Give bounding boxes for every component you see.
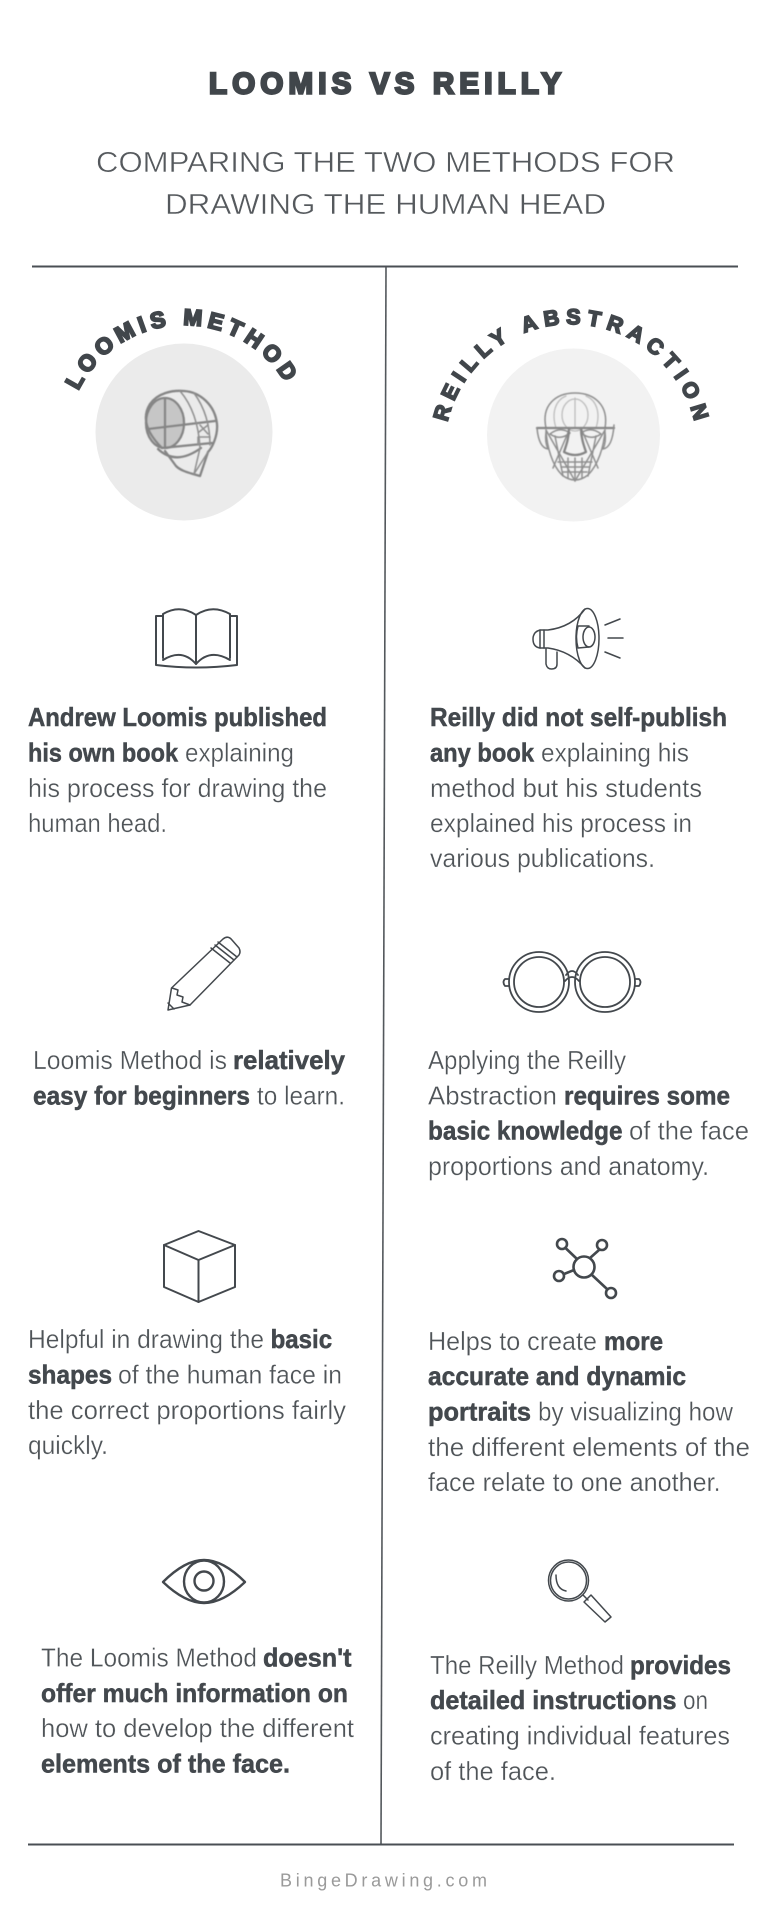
- footer: BingeDrawing.com: [280, 1871, 487, 1891]
- text block: Reilly knowledge: basic knowledge: [428, 1116, 622, 1146]
- text block: Reilly publication: explained his process in: [430, 808, 692, 838]
- icon: network nodes: [554, 1239, 616, 1298]
- text block: Reilly knowledge: requires some: [564, 1080, 730, 1110]
- text block: Loomis publication: Andrew Loomis published: [28, 702, 327, 732]
- text block: Loomis publication: explaining: [185, 738, 294, 768]
- text block: Loomis basic shapes: the correct proportions fairly: [28, 1395, 346, 1425]
- text block: Reilly publication: method but his students: [430, 773, 702, 803]
- subtitle: [96, 147, 675, 221]
- text block: Reilly dynamic portraits: more: [604, 1326, 663, 1356]
- icon: cube: [164, 1231, 235, 1302]
- text block: Loomis publication: his own book: [28, 738, 178, 768]
- icon: eye: [163, 1560, 245, 1603]
- text block: Reilly details: creating individual features: [430, 1721, 730, 1751]
- text block: Reilly publication: explaining his: [541, 738, 689, 768]
- panel: Reilly abstraction header: [432, 308, 710, 522]
- text block: Reilly dynamic portraits: [428, 1326, 750, 1497]
- text block: Reilly knowledge: proportions and anatomy.: [428, 1151, 709, 1181]
- text block: Reilly publication: [430, 702, 727, 873]
- text block: Loomis limits: offer much information on: [41, 1678, 348, 1708]
- subtitle: DRAWING THE HUMAN HEAD: [165, 189, 606, 221]
- circle background: [487, 348, 660, 522]
- text block: Reilly publication: any book: [430, 738, 534, 768]
- text block: Loomis limits: The Loomis Method: [41, 1643, 257, 1673]
- icon: Reilly abstraction head: [537, 393, 614, 481]
- text block: Reilly details: on: [683, 1685, 708, 1715]
- text block: Loomis basic shapes: [28, 1324, 346, 1460]
- curved heading: Reilly Abstraction: REILLY ABSTRACTION: [432, 308, 710, 422]
- text block: Reilly details: provides: [630, 1650, 731, 1680]
- circle background: [96, 344, 272, 520]
- title: LOOMIS VS REILLY: [209, 68, 561, 100]
- text block: Loomis limits: [41, 1643, 355, 1779]
- text block: Reilly knowledge: of the face: [629, 1116, 749, 1146]
- text block: Reilly details: [430, 1650, 731, 1786]
- icon: pencil: [168, 937, 240, 1010]
- icon: round glasses: [504, 952, 640, 1012]
- curved heading: Loomis Method: LOOMIS METHOD: [64, 308, 296, 391]
- text block: Reilly details: of the face.: [430, 1756, 556, 1786]
- text block: Loomis publication: human head.: [28, 808, 167, 838]
- text block: Reilly dynamic portraits: portraits: [428, 1397, 531, 1427]
- text block: Reilly knowledge: [428, 1045, 749, 1181]
- text block: Reilly dynamic portraits: Helps to create: [428, 1326, 597, 1356]
- icon: Loomis head construction: [146, 391, 217, 476]
- text block: Reilly publication: Reilly did not self-publish: [430, 702, 727, 732]
- subtitle: COMPARING THE TWO METHODS FOR: [96, 147, 675, 179]
- text block: Reilly details: detailed instructions: [430, 1685, 676, 1715]
- text block: Loomis limits: doesn't: [263, 1643, 352, 1673]
- text block: Loomis basic shapes: of the human face in: [118, 1360, 342, 1390]
- text block: Loomis basic shapes: shapes: [28, 1360, 112, 1390]
- text block: Loomis limits: elements of the face.: [41, 1749, 290, 1779]
- text block: Loomis basic shapes: basic: [271, 1324, 332, 1354]
- text block: Reilly dynamic portraits: accurate and dynamic: [428, 1361, 686, 1391]
- text block: Loomis ease: to learn.: [257, 1080, 345, 1110]
- icon: megaphone: [533, 608, 623, 669]
- text block: Reilly knowledge: Abstraction: [428, 1080, 557, 1110]
- text block: Reilly dynamic portraits: by visualizing how: [538, 1397, 733, 1427]
- text block: Loomis limits: how to develop the different: [41, 1713, 355, 1743]
- text block: Loomis ease: [33, 1045, 346, 1110]
- panel: Loomis method header: [64, 308, 296, 520]
- text block: Loomis ease: Loomis Method is: [33, 1045, 227, 1075]
- text block: Reilly details: The Reilly Method: [430, 1650, 624, 1680]
- text block: Loomis basic shapes: quickly.: [28, 1430, 108, 1460]
- text block: Reilly dynamic portraits: face relate to one another.: [428, 1467, 721, 1497]
- text block: Loomis publication: his process for drawing the: [28, 773, 327, 803]
- icon: magnifying glass: [548, 1560, 611, 1622]
- text block: Loomis publication: [28, 702, 327, 838]
- text block: Reilly publication: various publications.: [430, 843, 655, 873]
- text block: Loomis basic shapes: Helpful in drawing the: [28, 1324, 264, 1354]
- text block: Loomis ease: relatively: [233, 1045, 346, 1075]
- text block: Reilly dynamic portraits: the different elements of the: [428, 1432, 750, 1462]
- text block: Loomis ease: easy for beginners: [33, 1080, 250, 1110]
- icon: open book: [156, 609, 237, 668]
- text block: Reilly knowledge: Applying the Reilly: [428, 1045, 626, 1075]
